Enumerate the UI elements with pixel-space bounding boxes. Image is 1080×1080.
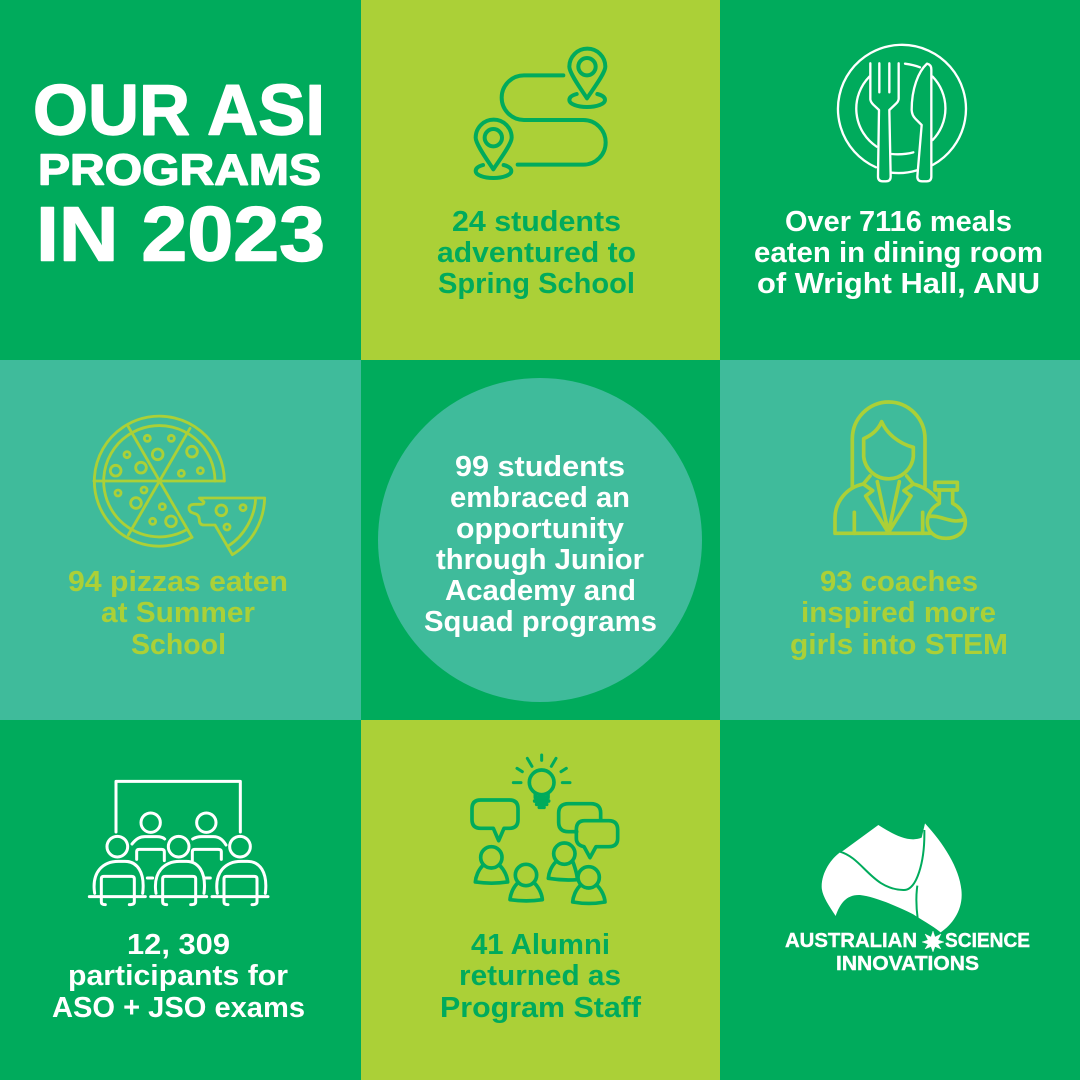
text: coaches stat: 93 coaches — [820, 566, 978, 598]
text: pizzas stat: School — [131, 629, 226, 661]
icon: plate with fork and knife — [838, 45, 966, 181]
text: pizzas stat: 94 pizzas eaten — [68, 566, 288, 598]
circle badge — [378, 378, 702, 702]
icon: australia map logo — [822, 823, 962, 932]
panel: junior academy centre — [361, 360, 720, 720]
icon: pizza with slice removed — [94, 416, 265, 555]
panel: coaches — [720, 360, 1080, 720]
text: exam participants stat: ASO + JSO exams — [52, 992, 305, 1024]
text: alumni stat: 41 Alumni — [471, 929, 610, 961]
heading: our asi programs in 2023 — [33, 72, 325, 278]
text: meals stat — [754, 206, 1043, 300]
heading: our asi programs in 2023: PROGRAMS — [38, 146, 321, 194]
icon: route with map pins — [476, 49, 606, 178]
panel: spring school — [361, 0, 720, 360]
panel: logo — [720, 720, 1080, 1080]
icon: seven-point star — [922, 931, 944, 952]
icon: woman scientist with flask — [835, 402, 965, 538]
text: junior academy stat — [424, 451, 657, 638]
text: pizzas stat: at Summer — [101, 597, 255, 629]
panel: pizzas — [0, 360, 361, 720]
text: meals stat: of Wright Hall, ANU — [757, 268, 1040, 300]
text: junior academy stat: opportunity — [456, 513, 624, 545]
text: exam participants stat — [52, 929, 305, 1024]
panel: title — [0, 0, 361, 360]
text: spring school stat — [437, 206, 636, 300]
text: coaches stat: inspired more — [801, 597, 996, 629]
heading: our asi programs in 2023: IN 2023 — [36, 192, 325, 278]
text: alumni stat: returned as — [459, 960, 621, 992]
text: junior academy stat: Squad programs — [424, 606, 657, 638]
text: coaches stat — [790, 566, 1008, 661]
text: exam participants stat: participants for — [68, 960, 288, 992]
icon: classroom of students — [89, 781, 268, 905]
panel: alumni — [361, 720, 720, 1080]
logo wordmark: SCIENCE — [945, 930, 1030, 952]
panel: meals — [720, 0, 1080, 360]
icon: people with speech bubbles and light bulb — [472, 755, 618, 903]
text: exam participants stat: 12, 309 — [127, 929, 230, 961]
logo wordmark: AUSTRALIAN — [785, 930, 917, 952]
text: pizzas stat — [68, 566, 288, 661]
text: spring school stat: 24 students — [452, 206, 621, 238]
text: alumni stat — [440, 929, 641, 1024]
text: meals stat: Over 7116 meals — [785, 206, 1012, 238]
text: junior academy stat: Academy and — [445, 575, 636, 607]
logo wordmark — [785, 930, 1030, 975]
text: junior academy stat: through Junior — [436, 544, 644, 576]
logo wordmark: INNOVATIONS — [836, 953, 979, 975]
text: meals stat: eaten in dining room — [754, 237, 1043, 269]
text: coaches stat: girls into STEM — [790, 629, 1008, 661]
text: junior academy stat: 99 students — [455, 451, 625, 483]
heading: our asi programs in 2023: OUR ASI — [33, 72, 325, 150]
text: junior academy stat: embraced an — [450, 482, 630, 514]
panel: exam participants — [0, 720, 361, 1080]
text: alumni stat: Program Staff — [440, 992, 641, 1024]
text: spring school stat: adventured to — [437, 237, 636, 269]
text: spring school stat: Spring School — [438, 268, 635, 300]
